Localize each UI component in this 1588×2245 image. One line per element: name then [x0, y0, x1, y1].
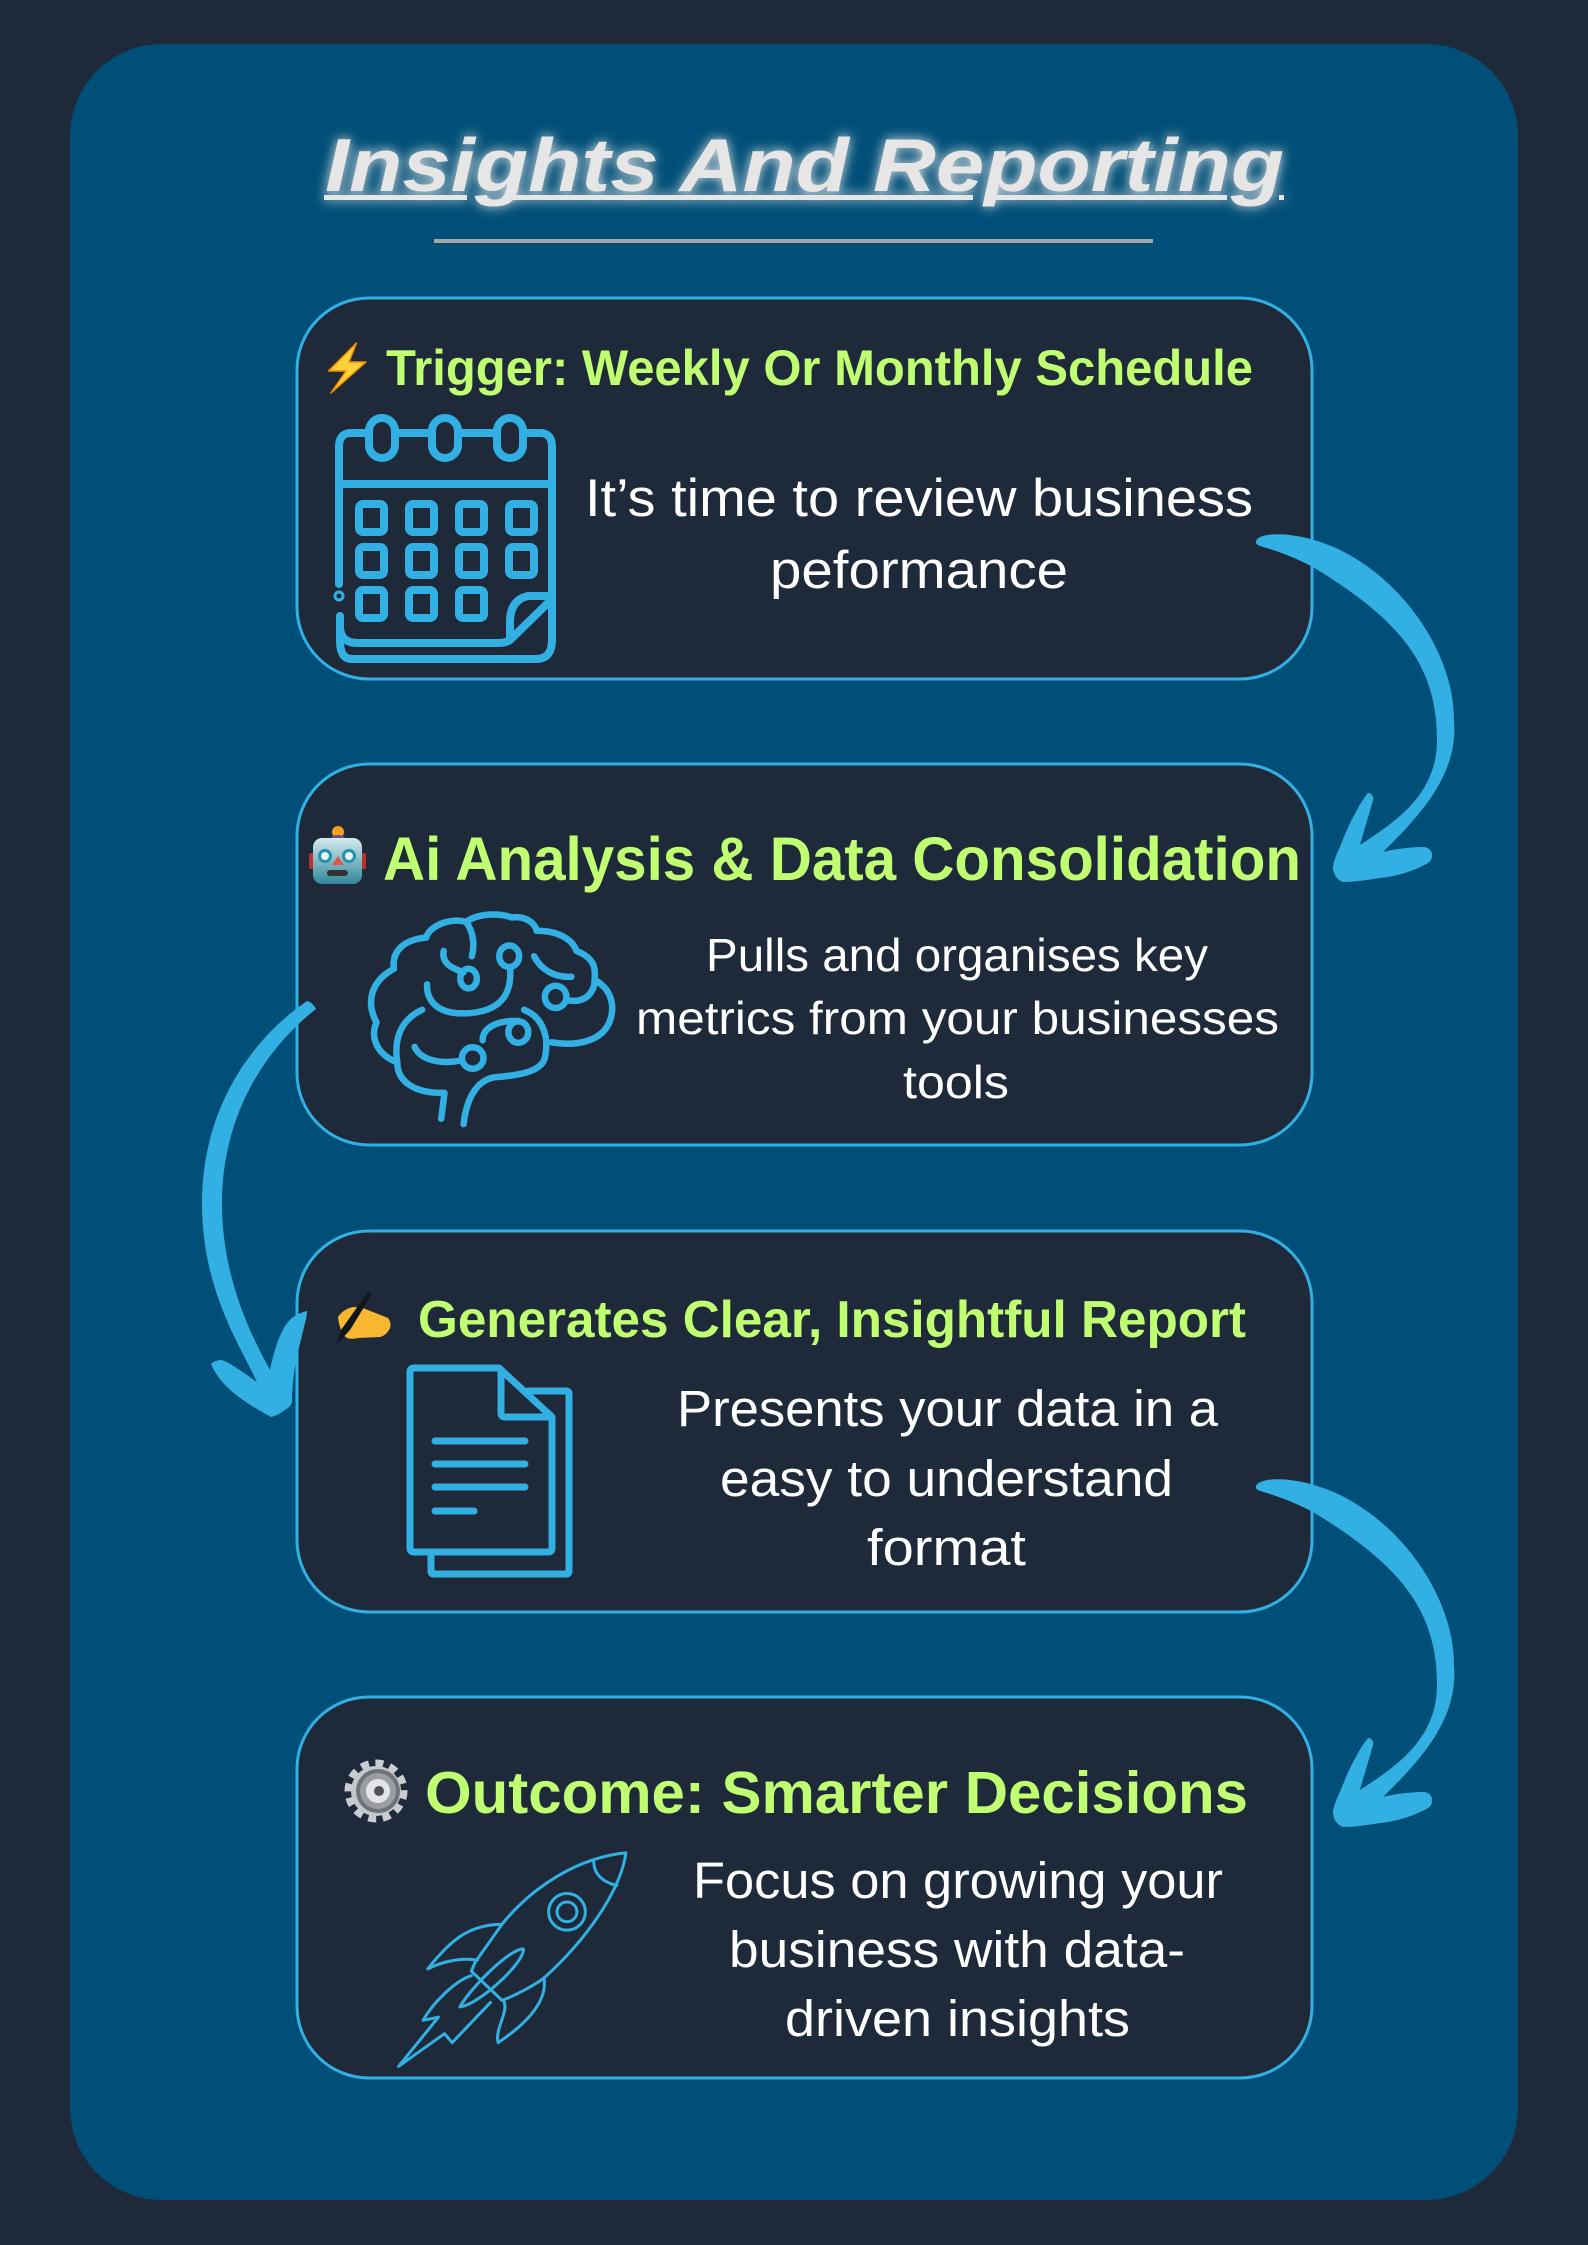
- body text: It’s time to review business: [585, 469, 1253, 528]
- body text: Focus on growing your: [693, 1852, 1223, 1909]
- arrow: report to outcome: [1256, 1479, 1454, 1827]
- icon: rocket: [399, 1853, 626, 2066]
- icon: brain: [371, 914, 612, 1124]
- body text: [677, 1380, 1219, 1576]
- icon: lightning emoji: [328, 343, 366, 393]
- icon: robot emoji: [309, 826, 366, 884]
- panel: outcome: [297, 1697, 1312, 2078]
- icon: calendar: [338, 418, 552, 659]
- body text: [585, 469, 1253, 600]
- body text: metrics from your businesses: [636, 992, 1279, 1044]
- icon: writing hand emoji: [337, 1292, 391, 1344]
- body text: format: [867, 1519, 1026, 1576]
- body text: peformance: [770, 541, 1068, 600]
- heading: ai analysis: Ai Analysis & Data Consolidation: [383, 825, 1301, 893]
- title: Insights And Reporting: [325, 123, 1284, 207]
- icon: gear emoji: [350, 1765, 402, 1817]
- panel: ai analysis: [297, 764, 1312, 1145]
- body text: driven insights: [785, 1990, 1130, 2047]
- body text: [693, 1852, 1223, 2047]
- panel: trigger: [297, 298, 1312, 679]
- body text: tools: [903, 1056, 1009, 1108]
- body text: Presents your data in a: [677, 1380, 1219, 1437]
- body text: [636, 929, 1279, 1108]
- arrow: trigger to analysis: [1256, 534, 1454, 882]
- heading: trigger: Trigger: Weekly Or Monthly Schedule: [386, 340, 1253, 396]
- body text: business with data-: [729, 1921, 1185, 1978]
- heading: outcome: Outcome: Smarter Decisions: [425, 1760, 1248, 1826]
- icon: document: [410, 1368, 569, 1574]
- body text: Pulls and organises key: [706, 929, 1208, 981]
- panel: report: [297, 1231, 1312, 1612]
- heading: report: Generates Clear, Insightful Report: [418, 1291, 1246, 1349]
- arrow: analysis to report: [202, 1001, 316, 1417]
- body text: easy to understand: [720, 1450, 1173, 1507]
